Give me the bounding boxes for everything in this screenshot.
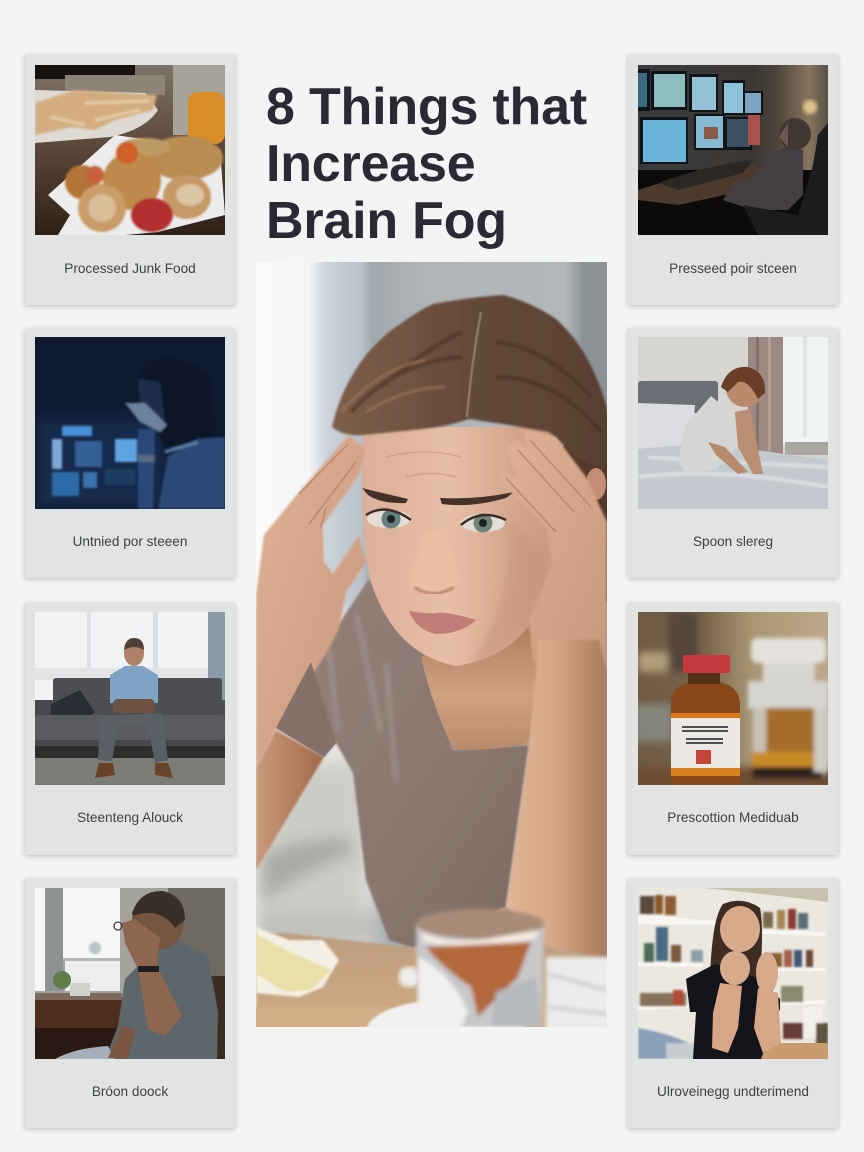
- title: Increase: [266, 135, 475, 193]
- photo: man at wall of monitors: [638, 65, 828, 235]
- panel: man sitting on couch: [25, 603, 235, 855]
- photo: medicine bottles: [638, 612, 828, 785]
- left upper arm: [256, 730, 324, 870]
- nose: [409, 532, 458, 593]
- ear: [586, 468, 606, 500]
- panel: processed junk food: [25, 55, 235, 305]
- caption: Bróon doock: [92, 1084, 168, 1099]
- white objects right: [546, 957, 616, 1032]
- hair: [332, 295, 607, 469]
- brows: [362, 488, 408, 503]
- photo: person sitting on bed: [638, 337, 828, 509]
- napkin: [256, 927, 339, 997]
- title: 8 Things that: [266, 78, 587, 136]
- panel: dark silhouette with screens: [25, 329, 235, 578]
- caption: Prescottion Mediduab: [667, 810, 799, 825]
- title: [266, 78, 587, 250]
- photo: woman before cluttered shelves: [638, 888, 828, 1059]
- caption: Untnied por steeen: [73, 534, 187, 549]
- photo: man by the window covering face: [35, 888, 225, 1059]
- forehead wrinkles: [386, 452, 461, 477]
- blurred room behind: [246, 612, 381, 952]
- sleeve: [276, 662, 336, 757]
- caption: Steenteng Alouck: [77, 810, 183, 825]
- right arm: [506, 640, 607, 960]
- coffee cup: [416, 909, 544, 1027]
- main photo: woman holding her head: [256, 262, 607, 1027]
- panel: prescription medication: [628, 603, 838, 855]
- panel: screens in dark room: [628, 55, 838, 305]
- title: Brain Fog: [266, 192, 507, 250]
- photo: plates of snacks: [35, 65, 225, 235]
- face: [362, 427, 556, 666]
- saucer: [366, 1000, 526, 1064]
- caption: Presseed poir stceen: [669, 261, 797, 276]
- panel: woman in front of shelves: [628, 879, 838, 1128]
- table: [256, 907, 607, 1027]
- photo: person in blue screen light: [35, 337, 225, 509]
- caption: Ulroveinegg undterimend: [657, 1084, 809, 1099]
- eyes: [366, 510, 506, 532]
- panel: sleep in bed: [628, 329, 838, 578]
- photo: man on grey sofa: [35, 612, 225, 785]
- lips: [409, 611, 476, 634]
- left hand and arm: [256, 435, 366, 767]
- caption: Spoon slereg: [693, 534, 773, 549]
- shirt: [276, 579, 529, 948]
- panel: man with hand on face: [25, 879, 235, 1128]
- back hair: [556, 412, 607, 602]
- right hand: [499, 430, 607, 672]
- caption: Processed Junk Food: [64, 261, 196, 276]
- chest and neck: [421, 612, 541, 750]
- face shadow: [471, 522, 546, 664]
